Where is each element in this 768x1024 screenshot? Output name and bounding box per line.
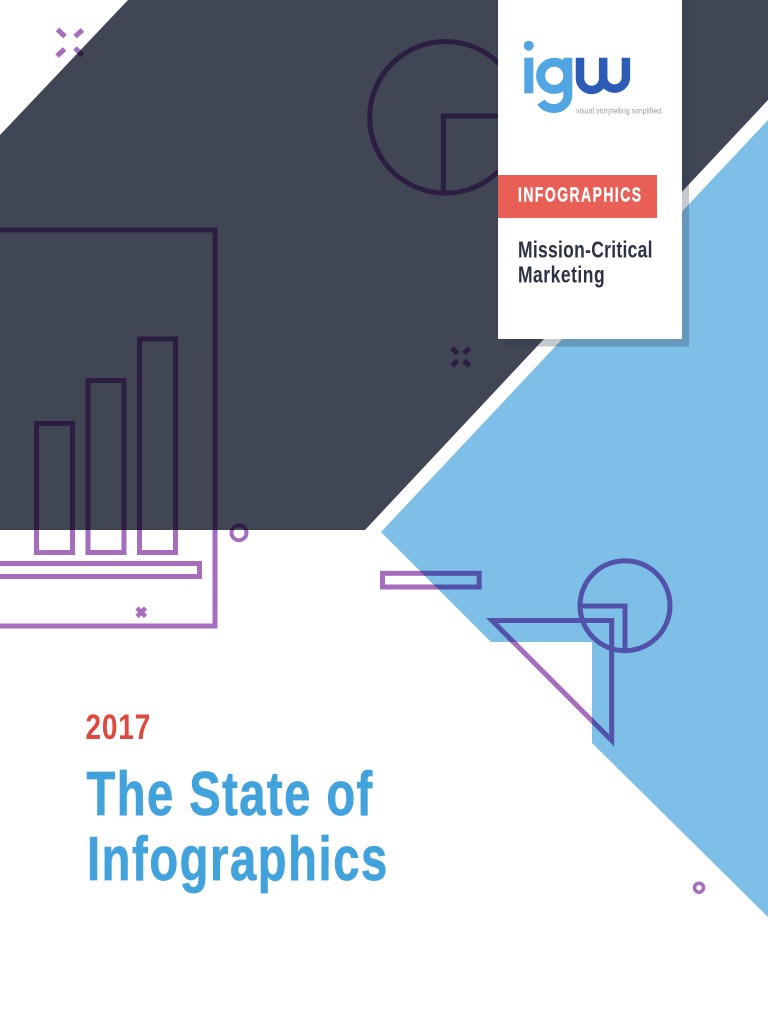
outline decorations — [0, 30, 704, 892]
chart baseline bar — [0, 564, 200, 576]
logo letter g — [541, 58, 568, 108]
icon: pie chart circle — [370, 42, 521, 193]
bar chart — [36, 339, 176, 552]
card subtitle: Mission-Critical — [518, 238, 653, 263]
logo tagline: visual storytelling simplified. — [576, 106, 663, 116]
logo letter i — [524, 41, 534, 93]
panel: dark angled background — [0, 0, 768, 530]
card shadow — [505, 0, 689, 346]
title: The State of — [86, 759, 373, 829]
icon: centre sparkle — [452, 348, 470, 366]
card subtitle: Marketing — [518, 264, 605, 288]
icon: bottom right ring — [694, 883, 704, 892]
panel: white card — [498, 0, 682, 339]
icon: small cross in chart — [137, 608, 146, 616]
card subtitle — [518, 238, 653, 288]
bar chart frame — [0, 230, 215, 626]
band label: INFOGRAPHICS — [518, 183, 641, 206]
icon: right pie circle — [580, 561, 670, 651]
year: 2017 — [86, 707, 150, 747]
title — [86, 759, 387, 894]
logo: igw — [524, 41, 663, 116]
panel: light blue angled shape — [381, 120, 768, 917]
title: Infographics — [87, 824, 387, 894]
floating rectangle — [382, 573, 479, 587]
icon: small ring by chart — [232, 525, 246, 540]
icon: top left sparkle — [57, 30, 82, 56]
icon: triangle — [492, 620, 612, 740]
category band — [498, 175, 657, 218]
logo letter w — [580, 58, 626, 90]
